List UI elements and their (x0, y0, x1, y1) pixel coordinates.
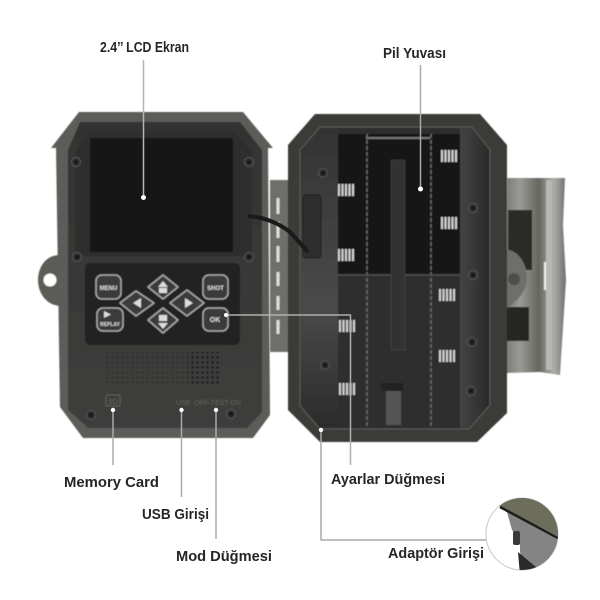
left camera shell (51, 112, 273, 438)
callout: memory card: Memory Card (64, 474, 159, 491)
OK button: OK (210, 317, 220, 324)
callout: settings button: Ayarlar Düğmesi (331, 471, 445, 488)
label strip (391, 160, 405, 350)
adapter socket (381, 383, 403, 425)
callout: USB: USB Girişi (142, 506, 209, 523)
callout: USB (142, 408, 209, 523)
mounting ear left (38, 255, 60, 306)
callout: battery: Pil Yuvası (383, 46, 446, 62)
tray screws (318, 168, 478, 396)
REPLAY button: REPLAY (100, 322, 121, 328)
SD label: SD (108, 399, 118, 406)
REPLAY button (97, 308, 123, 331)
d-pad left (120, 291, 154, 316)
USB and mode labels: USB OFF-TEST-ON (176, 400, 241, 407)
cable loop (248, 216, 308, 252)
springs (339, 150, 456, 395)
right camera shell (288, 114, 507, 442)
button panel (85, 263, 240, 345)
right camera interior (288, 114, 527, 442)
SD label (106, 395, 120, 406)
left camera front (38, 112, 273, 438)
callout: LCD (100, 40, 189, 200)
callout: adapter: Adaptör Girişi (388, 545, 484, 562)
callout: adapter (319, 428, 516, 562)
camouflage strap (505, 178, 566, 375)
tray right band (460, 128, 489, 428)
d-pad up (148, 275, 178, 299)
callout: mode (176, 408, 272, 565)
hinge (270, 180, 290, 352)
OK button (203, 308, 228, 331)
callout: LCD: 2.4’’ LCD Ekran (100, 40, 189, 56)
inner tray (300, 127, 490, 429)
mounting ear right (500, 249, 527, 312)
screws (72, 158, 254, 420)
SHOT button (203, 275, 228, 299)
SHOT button: SHOT (207, 286, 224, 292)
callout: memory card (64, 408, 159, 491)
MENU button (96, 275, 121, 299)
divider lines (367, 134, 431, 426)
speaker grille (105, 352, 220, 386)
callout: mode: Mod Düğmesi (176, 548, 272, 565)
tray left band (301, 128, 338, 426)
d-pad right (170, 290, 204, 316)
LCD screen (90, 138, 233, 252)
inset: adapter port zoom (486, 498, 558, 570)
battery compartment lower (338, 274, 460, 426)
callout: battery (383, 46, 446, 192)
screen surround (75, 132, 252, 256)
callout: settings button (224, 313, 445, 488)
battery compartment upper (338, 134, 460, 274)
MENU button: MENU (100, 286, 117, 292)
side latch (303, 195, 321, 258)
d-pad down (148, 308, 178, 333)
